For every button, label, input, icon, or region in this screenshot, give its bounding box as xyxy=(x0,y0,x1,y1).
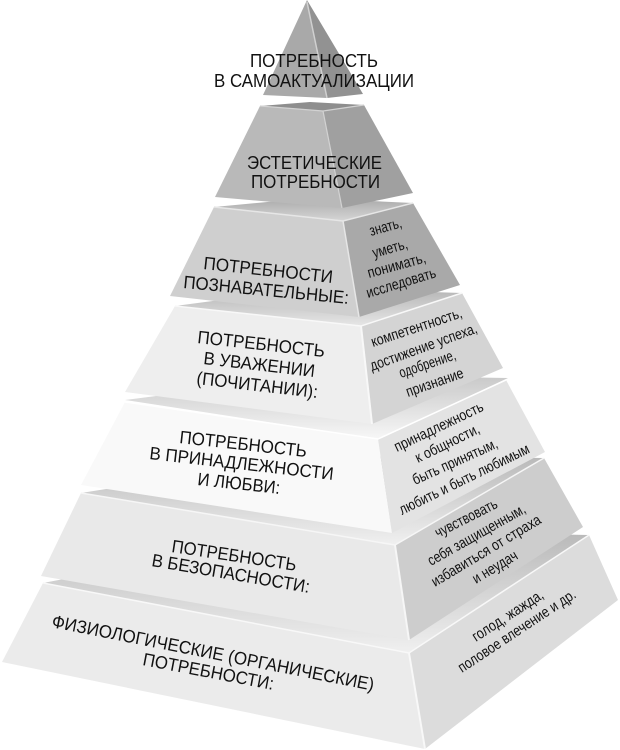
tier 3 heading xyxy=(183,253,350,308)
tier 5 side text xyxy=(391,398,532,519)
tier 4 heading: ПОТРЕБНОСТЬ xyxy=(197,327,326,361)
tier 1 heading: В САМОАКТУАЛИЗАЦИИ xyxy=(214,71,414,91)
tier 1 heading: ПОТРЕБНОСТЬ xyxy=(250,51,378,71)
tier 4: esteem needs xyxy=(125,288,503,424)
tier 4 side text: признание xyxy=(404,365,466,401)
tier 7 side text: половое влечение и др. xyxy=(455,586,579,676)
tier 4 side face xyxy=(361,293,503,424)
tier 4 heading xyxy=(196,327,326,402)
tier 3: cognitive needs xyxy=(170,198,460,317)
tier 6 top surface xyxy=(81,455,544,545)
tier 1 heading xyxy=(214,51,414,91)
tier 3 side text: исследовать xyxy=(364,264,438,302)
tier 7 side face xyxy=(409,535,618,749)
tier 3 side text: знать, xyxy=(367,215,404,240)
tier 6 side text: себя защищенным, xyxy=(425,501,529,569)
tier 5 side text: любить и быть любимым xyxy=(396,441,532,519)
tier 5 heading: В ПРИНАДЛЕЖНОСТИ xyxy=(149,443,335,484)
tier 2 front face xyxy=(215,106,342,208)
tier 7 heading: ФИЗИОЛОГИЧЕСКИЕ (ОРГАНИЧЕСКИЕ) xyxy=(50,611,376,695)
tier 1: self-actualization apex xyxy=(214,0,414,98)
tier 3 heading: ПОЗНАВАТЕЛЬНЫЕ: xyxy=(183,272,350,308)
tier 4 heading: (ПОЧИТАНИИ): xyxy=(196,368,319,402)
tier 2 heading xyxy=(247,153,382,192)
tier 6 heading: В БЕЗОПАСНОСТИ: xyxy=(150,550,311,597)
tier 4 front face xyxy=(125,306,372,424)
tier 2 heading: ПОТРЕБНОСТИ xyxy=(251,172,380,192)
tier 5 heading: И ЛЮБВИ: xyxy=(197,469,281,498)
tier 4 side text xyxy=(368,305,480,401)
tier 2: aesthetic needs xyxy=(215,102,413,208)
tier 3 front face xyxy=(170,207,359,317)
tier 4 side text: компетентность, xyxy=(369,305,464,351)
tier 4 side text: одобрение, xyxy=(397,347,458,382)
tier 3 side face xyxy=(343,203,460,317)
tier 1 front face xyxy=(263,0,327,98)
tier 6 side text: чувствовать xyxy=(432,495,501,542)
tier 3 side text xyxy=(364,215,438,302)
tier 7 side text: голод, жажда, xyxy=(469,586,547,645)
tier 3 side text: уметь, xyxy=(370,236,410,262)
tier 5 heading: ПОТРЕБНОСТЬ xyxy=(179,427,308,461)
tier 5 side text: принадлежность xyxy=(391,398,486,456)
tier 5 side text: быть принятым, xyxy=(410,435,500,489)
tier 6: safety needs xyxy=(41,455,583,640)
tier 5 side text: к общности, xyxy=(412,421,483,467)
tier 6 side text: и неудач xyxy=(469,547,521,587)
tier 5 side face xyxy=(378,380,545,533)
tier 7 top surface xyxy=(43,530,589,653)
tier 5 front face xyxy=(81,402,392,533)
tier 4 side text: достижение успеха, xyxy=(368,320,480,375)
tier 6 side face xyxy=(395,458,583,640)
tier 7 heading: ПОТРЕБНОСТИ: xyxy=(141,649,276,694)
tier 7: physiological needs xyxy=(2,530,618,749)
tier 5: belonging and love xyxy=(81,375,545,533)
tier 1 side face xyxy=(307,0,363,98)
tier 3 side text: понимать, xyxy=(366,250,428,282)
tier 6 side text: избавиться от страха xyxy=(428,511,545,590)
tier 6 front face xyxy=(41,493,409,640)
tier 6 heading: ПОТРЕБНОСТЬ xyxy=(170,536,298,575)
tier 4 top surface xyxy=(175,288,462,326)
tier 2 side face xyxy=(323,105,413,208)
tier 4 heading: В УВАЖЕНИИ xyxy=(203,348,316,381)
tier 5 heading xyxy=(149,427,335,498)
tier 3 heading: ПОТРЕБНОСТИ xyxy=(203,253,334,287)
tier 7 front face xyxy=(2,583,425,749)
tier 2 heading: ЭСТЕТИЧЕСКИЕ xyxy=(247,153,382,173)
tier 3 top surface xyxy=(214,198,413,221)
tier 2 top surface xyxy=(260,102,364,111)
tier 5 top surface xyxy=(125,375,508,439)
